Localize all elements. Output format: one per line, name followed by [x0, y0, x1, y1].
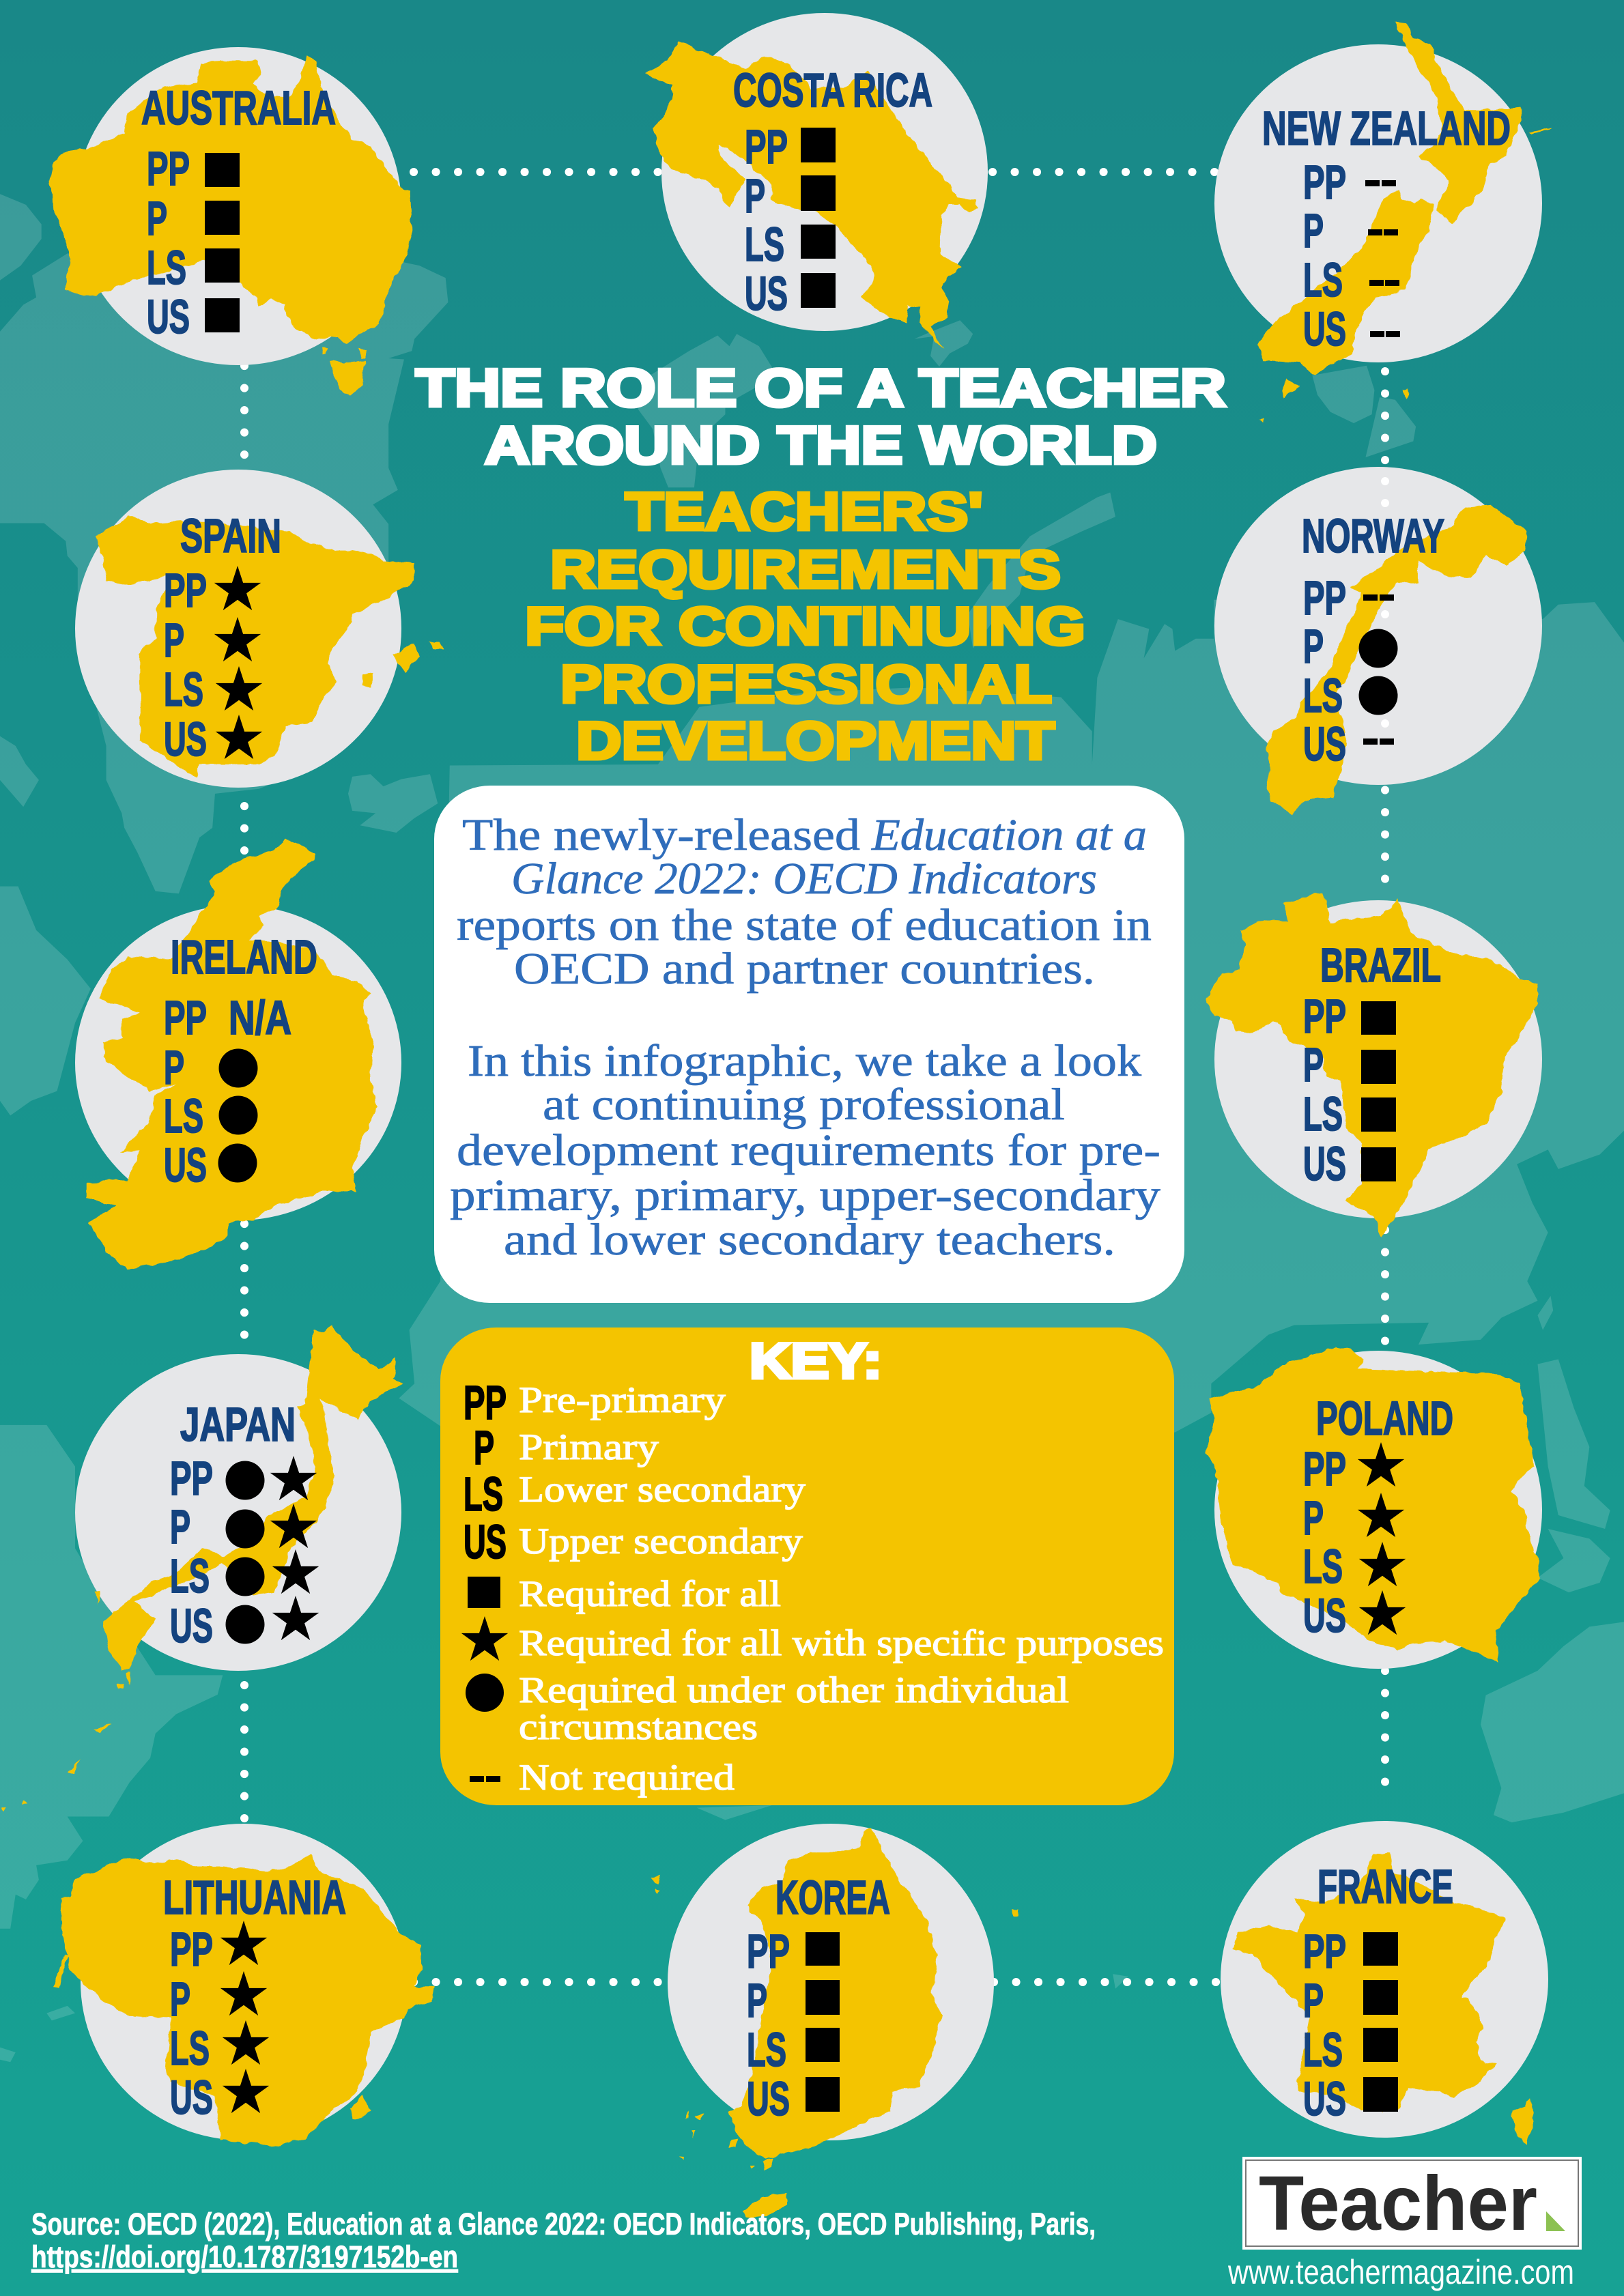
row labels and symbols: LS: [1303, 669, 1343, 722]
connector: Australia to Costa Rica: [414, 168, 662, 176]
country name: AUSTRALIA: [141, 81, 336, 134]
panel: Spain: [75, 470, 443, 788]
row labels and squares: LS: [1303, 2023, 1343, 2076]
logo: Teacher: Teacher: [1259, 2160, 1537, 2246]
intro text: In this infographic, we take a look: [468, 1036, 1141, 1086]
row labels and squares: P: [745, 169, 765, 223]
connector: Costa Rica to New Zealand: [993, 168, 1216, 176]
row labels and squares: US: [745, 267, 788, 320]
intro text: primary, primary, upper-secondary: [450, 1171, 1160, 1220]
row labels and squares: PP: [147, 142, 190, 195]
row labels and stars: P: [1303, 1491, 1324, 1545]
row labels and squares: P: [147, 192, 167, 245]
row labels and squares: PP: [745, 120, 788, 173]
connector: Lithuania to Korea: [414, 1978, 662, 1986]
connector: Korea to France: [994, 1978, 1218, 1986]
key: primary: [474, 1421, 659, 1474]
row labels and stars: P: [164, 614, 184, 667]
panel: Australia: [51, 47, 412, 396]
subtitle: [525, 481, 1085, 771]
panel: Japan: [3, 1326, 404, 1811]
row labels and circles: N/A: [229, 991, 291, 1044]
panel: Brazil: [1206, 892, 1542, 1237]
row labels and circles: LS: [164, 1089, 203, 1143]
panel: Ireland: [75, 839, 401, 1269]
country name: SPAIN: [180, 509, 281, 562]
key: primary: P: [474, 1421, 494, 1474]
row labels and circles: US: [164, 1138, 207, 1192]
row labels, circles and stars: PP: [170, 1452, 213, 1505]
panel: Korea: [652, 1824, 1020, 2219]
connector: Spain to Ireland: [240, 806, 248, 908]
country name: BRAZIL: [1320, 938, 1441, 992]
row labels and stars: LS: [164, 663, 203, 716]
row labels and stars: PP: [164, 564, 207, 617]
connector: Brazil to Poland: [1381, 1230, 1389, 1341]
row labels and stars: US: [1303, 1589, 1346, 1642]
subtitle: PROFESSIONAL: [560, 654, 1052, 714]
panel: Norway: [1214, 467, 1542, 814]
subtitle: REQUIREMENTS: [550, 539, 1061, 599]
row labels and dashes: LS: [1303, 253, 1343, 306]
map: Brazil: [1206, 892, 1537, 1237]
country name: NEW ZEALAND: [1262, 102, 1511, 155]
key: upper secondary: US: [464, 1515, 507, 1568]
connector: Norway to Brazil: [1381, 768, 1389, 901]
intro text: development requirements for pre-: [457, 1125, 1160, 1175]
row labels and squares: US: [747, 2072, 790, 2125]
key: lower secondary: LS: [464, 1467, 503, 1521]
map: Korea: [652, 1828, 1020, 2219]
country name: POLAND: [1316, 1392, 1453, 1445]
row labels and squares: [147, 142, 240, 343]
source citation: Source: OECD (2022), Education at a Glance 2022: OECD Indicators, OECD Publishing, Paris,: [31, 2207, 1096, 2241]
key: upper secondary: Upper secondary: [519, 1521, 803, 1562]
intro text: Education at a: [871, 810, 1147, 860]
row labels and stars: [1303, 1442, 1406, 1642]
row labels, circles and stars: P: [170, 1500, 190, 1553]
intro text: reports on the state of education in: [457, 900, 1152, 950]
connector: Japan to Lithuania: [240, 1685, 248, 1822]
connector dots showing through the circle: [1381, 477, 1389, 728]
country name: COSTA RICA: [733, 63, 932, 117]
connector: Ireland to Japan: [240, 1224, 248, 1355]
map: Japan: [3, 1326, 404, 1811]
row labels and squares: [745, 120, 836, 320]
country name: LITHUANIA: [163, 1871, 346, 1924]
intro text: OECD and partner countries.: [514, 944, 1095, 994]
key: upper secondary: [464, 1515, 803, 1568]
country name: IRELAND: [171, 930, 317, 984]
source citation: https://doi.org/10.1787/3197152b-en: [31, 2239, 458, 2274]
map: Costa Rica: [645, 42, 977, 349]
map: Poland: [1206, 1347, 1540, 1661]
row labels and dashes: US: [1303, 302, 1346, 356]
country name: FRANCE: [1317, 1860, 1453, 1913]
subtitle: DEVELOPMENT: [576, 711, 1055, 771]
map: Ireland: [85, 839, 378, 1269]
country name: KOREA: [775, 1871, 890, 1924]
key: pre-primary: Pre-primary: [519, 1379, 726, 1420]
row labels and squares: PP: [1303, 990, 1346, 1043]
map: Australia: [51, 56, 412, 396]
row labels and stars: P: [170, 1972, 190, 2026]
country name: JAPAN: [180, 1398, 296, 1451]
panel: Lithuania: [52, 1824, 435, 2147]
connector: Poland to France: [1381, 1671, 1389, 1803]
row labels and squares: PP: [747, 1925, 790, 1978]
connector: New Zealand to Norway: [1381, 371, 1389, 505]
panel: introduction: [434, 786, 1184, 1303]
panel: Costa Rica: [645, 13, 988, 349]
row labels and stars: LS: [170, 2022, 210, 2075]
subtitle: FOR CONTINUING: [525, 596, 1085, 656]
row labels and dashes: PP: [1303, 156, 1346, 209]
row labels and squares: LS: [1303, 1087, 1343, 1140]
panel: France: [1221, 1821, 1548, 2144]
row labels and squares: [1303, 990, 1396, 1190]
subtitle: TEACHERS': [625, 481, 983, 541]
country name: NORWAY: [1302, 509, 1444, 562]
row labels and squares: US: [1303, 2072, 1346, 2125]
panel: New Zealand: [1214, 22, 1550, 423]
connector: Australia to Spain: [240, 366, 248, 471]
intro text: at continuing professional: [543, 1080, 1065, 1130]
row labels and stars: US: [164, 713, 207, 766]
row labels and squares: US: [1303, 1137, 1346, 1190]
row labels and circles: [164, 991, 291, 1192]
map: Lithuania: [52, 1854, 435, 2147]
row labels, circles and stars: LS: [170, 1549, 210, 1603]
row labels and stars: [164, 564, 262, 766]
title: AROUND THE WORLD: [485, 415, 1157, 475]
key heading: KEY:: [750, 1334, 882, 1389]
key: lower secondary: [464, 1467, 806, 1521]
key: required under other individual circumstances: Required under other individual: [519, 1669, 1069, 1710]
source citation: [31, 2207, 1096, 2274]
key: pre-primary: PP: [464, 1376, 507, 1429]
row labels and symbols: US: [1303, 717, 1346, 771]
row labels and circles: P: [164, 1041, 184, 1094]
map: Norway: [1266, 504, 1527, 814]
panel: Poland: [1206, 1347, 1542, 1669]
row labels and squares: LS: [745, 218, 784, 271]
row labels, circles and stars: US: [170, 1599, 213, 1652]
row labels and circles: PP: [164, 991, 207, 1044]
row labels and symbols: PP: [1303, 571, 1346, 625]
row labels and squares: LS: [147, 241, 186, 294]
row labels and dashes: P: [1303, 204, 1324, 257]
key: required under other individual circumstances: circumstances: [519, 1706, 758, 1747]
title: [416, 358, 1226, 475]
row labels and stars: LS: [1303, 1540, 1343, 1593]
intro text: [450, 810, 1160, 1265]
row labels and symbols: P: [1303, 620, 1324, 673]
row labels and symbols: [1303, 571, 1398, 771]
panel: key: [440, 1328, 1174, 1805]
title: THE ROLE OF A TEACHER: [416, 358, 1226, 418]
key: not required: Not required: [519, 1757, 735, 1798]
intro text: Glance 2022: OECD Indicators: [511, 854, 1097, 904]
row labels and squares: [747, 1925, 840, 2125]
row labels and squares: [1303, 1925, 1398, 2125]
key: lower secondary: Lower secondary: [519, 1469, 806, 1510]
row labels and squares: US: [147, 290, 190, 343]
row labels and squares: P: [1303, 1038, 1324, 1091]
row labels and stars: [170, 1921, 269, 2124]
key: primary: Primary: [519, 1426, 659, 1467]
key: required under other individual circumstances: [466, 1669, 1069, 1747]
intro text: and lower secondary teachers.: [504, 1215, 1115, 1265]
key: pre-primary: [464, 1376, 726, 1429]
row labels and squares: PP: [1303, 1925, 1346, 1978]
row labels and squares: P: [747, 1974, 767, 2027]
row labels and squares: LS: [747, 2023, 786, 2076]
map: New Zealand: [1258, 22, 1550, 423]
intro text: The newly-released: [462, 810, 860, 860]
key: required for all: Required for all: [519, 1573, 781, 1614]
row labels and stars: PP: [1303, 1442, 1346, 1495]
row labels and stars: PP: [170, 1923, 213, 1976]
map: France: [1235, 1852, 1533, 2144]
row labels, circles and stars: [170, 1452, 319, 1652]
row labels and dashes: [1303, 156, 1400, 356]
row labels and stars: US: [170, 2071, 213, 2124]
key: required for all with specific purposes: Required for all with specific purposes: [519, 1622, 1164, 1663]
map: Spain: [96, 515, 443, 777]
row labels and squares: P: [1303, 1974, 1324, 2027]
